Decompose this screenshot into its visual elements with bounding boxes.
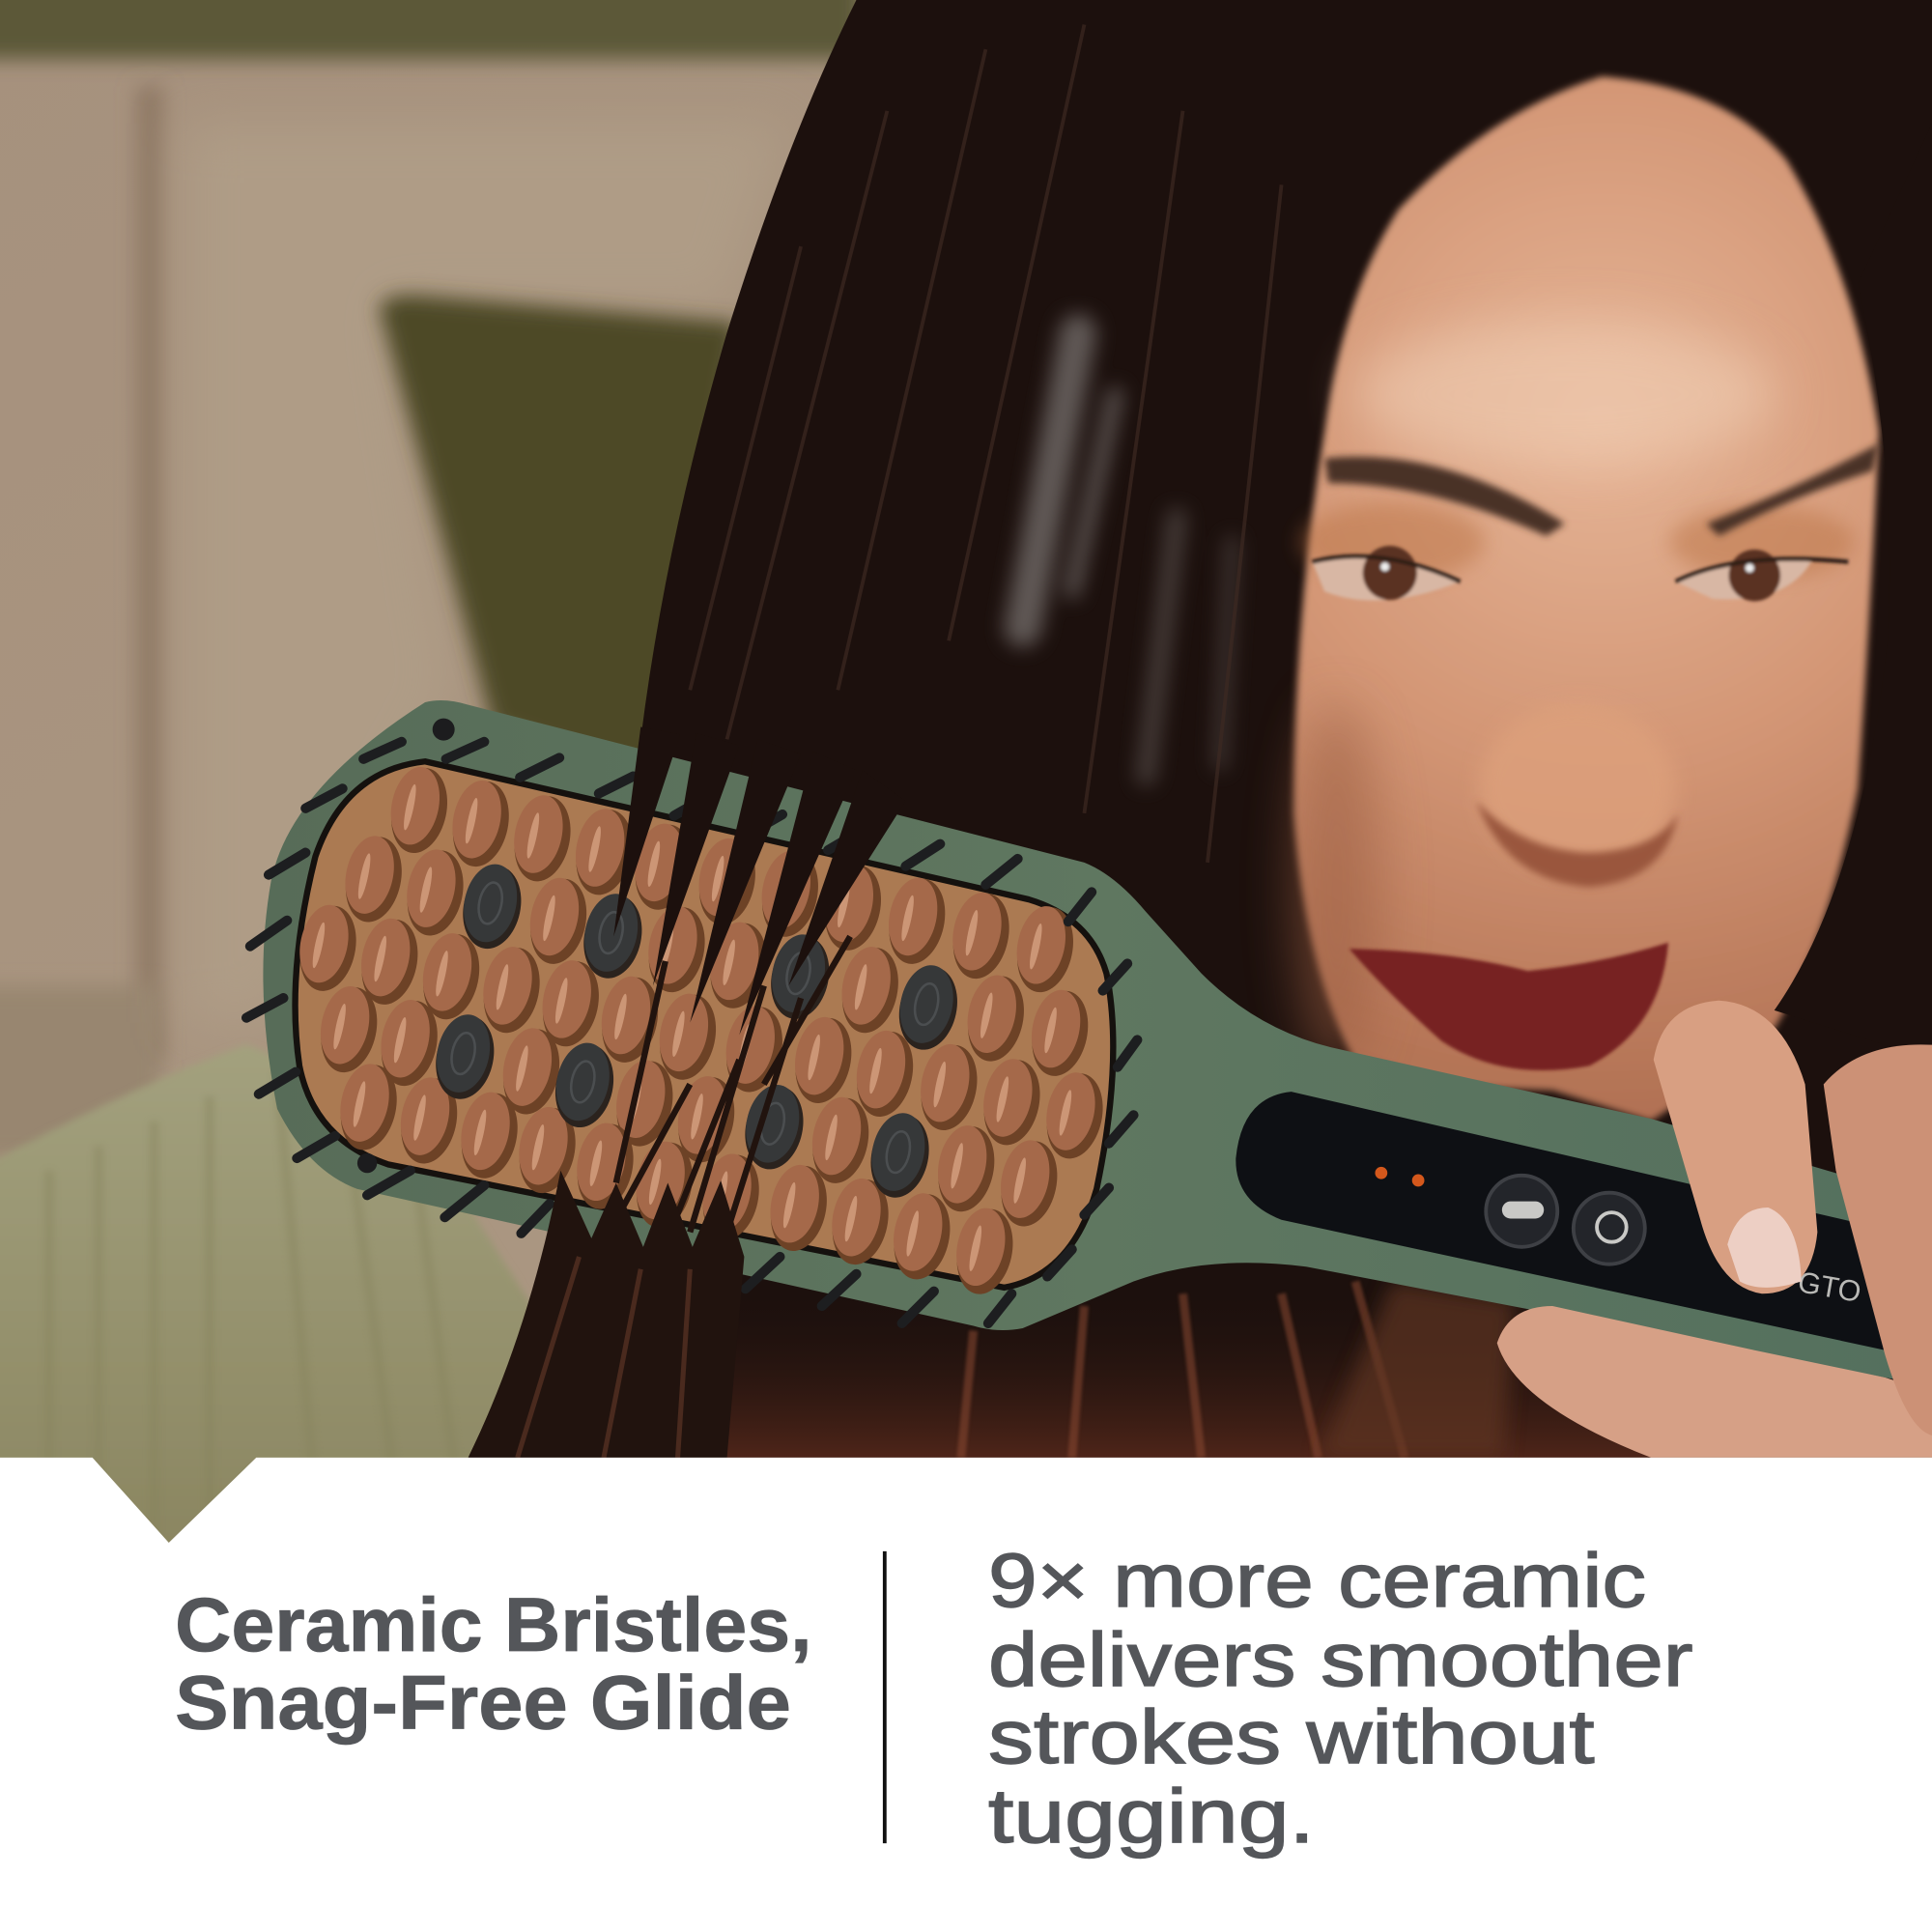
background: sofa	[0, 0, 1932, 1479]
left eyebrow	[1324, 457, 1565, 536]
cheek shade	[1293, 702, 1380, 1072]
right eye socket tint	[1669, 505, 1855, 579]
lips	[1350, 943, 1668, 1070]
right eyebrow	[1707, 443, 1879, 536]
left eye socket tint	[1300, 502, 1485, 582]
hair: right side	[1775, 124, 1932, 1060]
control panel	[1236, 1092, 1897, 1353]
description text: tugging.	[988, 1773, 1315, 1859]
right eye	[1676, 550, 1848, 601]
neck	[1319, 1282, 1516, 1458]
heading	[175, 1581, 812, 1746]
hair strands over brush	[469, 727, 906, 1458]
ceramic plate	[296, 761, 1113, 1288]
heading: Ceramic Bristles,	[175, 1581, 812, 1667]
face	[1293, 76, 1879, 1458]
divider	[883, 1551, 887, 1843]
thumb	[1654, 1001, 1817, 1293]
screws	[433, 719, 455, 741]
hand	[1497, 1001, 1932, 1458]
brand text: GTO	[1795, 1265, 1863, 1309]
thumb nail	[1727, 1208, 1802, 1288]
black pins	[246, 742, 1137, 1323]
forehead highlight	[1355, 321, 1775, 469]
right finger	[1824, 1044, 1932, 1435]
description text: strokes without	[988, 1693, 1595, 1779]
brush body	[263, 700, 1932, 1386]
white caption panel with pointer notch	[0, 1458, 1932, 1932]
copper bristles	[293, 762, 1110, 1299]
heading: Snag-Free Glide	[175, 1660, 791, 1746]
dark ceramic bristles	[429, 859, 965, 1203]
brush	[246, 700, 1932, 1386]
description text: 9× more ceramic	[988, 1537, 1646, 1623]
left eye	[1312, 546, 1460, 601]
lower palm	[1497, 1306, 1932, 1458]
description text: delivers smoother	[988, 1616, 1693, 1702]
background: olive pillow	[380, 296, 739, 788]
hair: main mass	[469, 0, 1932, 1458]
background: knit sweater	[0, 1045, 579, 1565]
nose	[1476, 702, 1678, 887]
description text	[988, 1537, 1693, 1859]
